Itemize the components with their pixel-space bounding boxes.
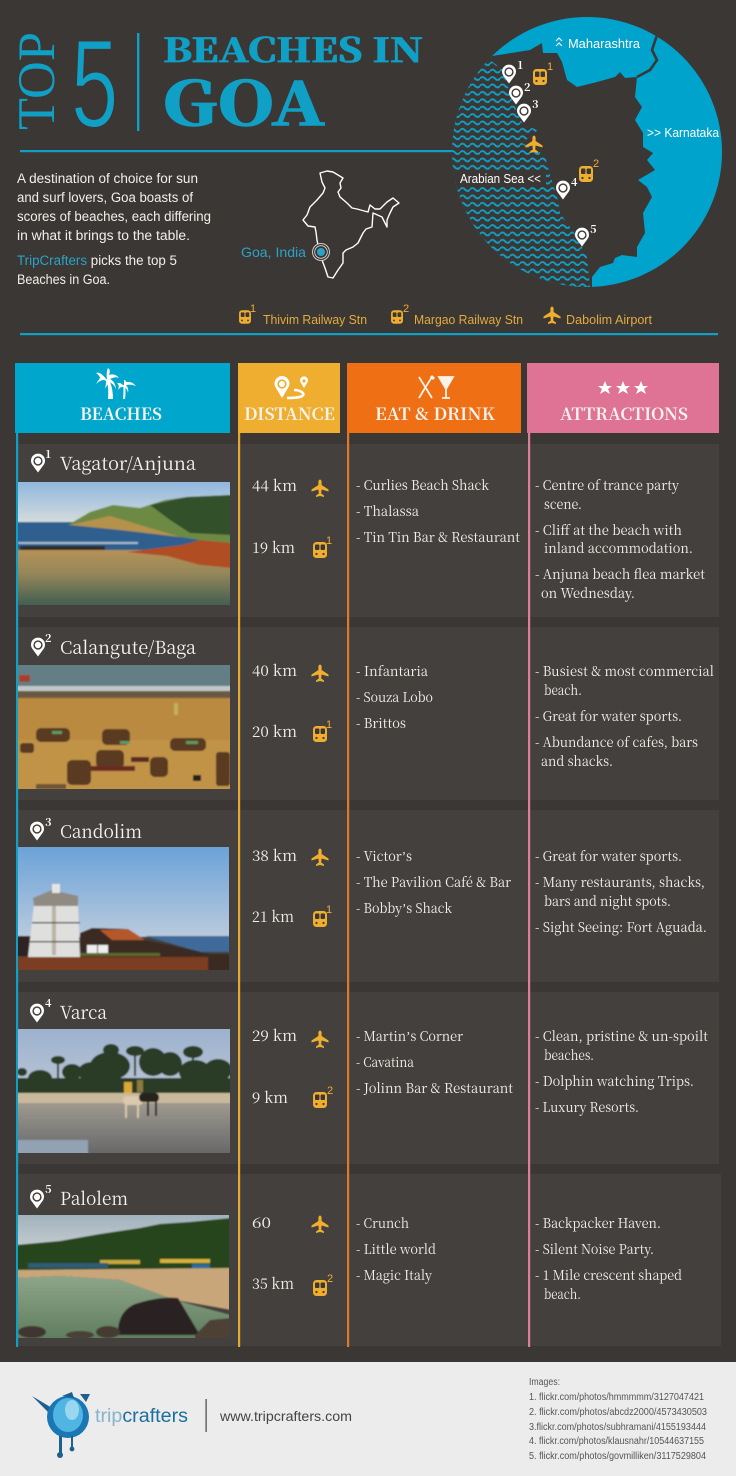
- header label: DISTANCE: [244, 400, 335, 425]
- attractions list: [535, 474, 705, 602]
- beach pins: 3: [532, 96, 538, 112]
- map labels: Maharashtra: [568, 36, 641, 51]
- icon: three stars: [598, 381, 648, 394]
- website: www.tripcrafters.com: [219, 1408, 352, 1424]
- photo: Calangute beach: [16, 663, 232, 791]
- title divider: [137, 33, 139, 131]
- icon: palm trees: [96, 368, 136, 399]
- attractions list: - Many restaurants, shacks,: [535, 871, 705, 891]
- distances: 60: [252, 1212, 271, 1233]
- attractions list: beaches.: [544, 1044, 594, 1064]
- row 2: Calangute/Baga: [16, 630, 714, 791]
- intro text: Beaches in Goa.: [17, 272, 110, 287]
- photo: Vagator coast: [16, 480, 232, 607]
- beach title: Varca: [60, 999, 107, 1025]
- title: Goa: GOA: [163, 57, 325, 142]
- title: TOP: TOP: [8, 32, 66, 130]
- attractions list: and shacks.: [541, 750, 613, 770]
- beach title: 5: [45, 1181, 52, 1197]
- Arabian Sea waves: [452, 61, 590, 287]
- beach title: Calangute/Baga: [60, 634, 196, 660]
- attractions list: [535, 845, 707, 936]
- eat and drink list: [356, 1212, 436, 1284]
- eat and drink list: [356, 1025, 513, 1097]
- photo: Fort Aguada: [16, 845, 231, 972]
- map labels: Arabian Sea <<: [460, 171, 541, 186]
- intro text: scores of beaches, each differing: [17, 209, 211, 224]
- image credits: 1. flickr.com/photos/hmmmmm/3127047421: [529, 1392, 704, 1403]
- intro text: and surf lovers, Goa boasts of: [17, 190, 193, 205]
- horses and riders: [123, 1080, 159, 1118]
- eat and drink list: - Bobby’s Shack: [356, 897, 453, 917]
- map transport icons: 1: [547, 61, 553, 73]
- attractions list: - 1 Mile crescent shaped: [535, 1264, 682, 1284]
- legend: Thivim Railway Stn: [263, 313, 367, 327]
- beach pins: 4: [571, 174, 578, 190]
- eat and drink list: - Victor’s: [356, 845, 412, 865]
- beach pins: [502, 57, 597, 246]
- eat and drink list: - Crunch: [356, 1212, 409, 1232]
- eat and drink list: - The Pavilion Café & Bar: [356, 871, 512, 891]
- distances: 1: [326, 904, 332, 916]
- map transport icons: [526, 61, 599, 182]
- attractions list: - Abundance of cafes, bars: [535, 731, 698, 751]
- beach title: [30, 995, 107, 1025]
- footer: [0, 1362, 736, 1476]
- eat and drink list: [356, 845, 512, 917]
- distances: 19 km: [252, 537, 295, 558]
- logo wordmark: tripcrafters: [95, 1406, 188, 1427]
- attractions list: - Great for water sports.: [535, 845, 682, 865]
- attractions list: - Cliff at the beach with: [535, 519, 682, 539]
- beach title: [30, 814, 142, 844]
- attractions list: [535, 1025, 708, 1116]
- India map: [241, 171, 399, 278]
- panel: beaches header: [15, 363, 230, 433]
- distances: 1: [326, 535, 332, 547]
- image credits: 2. flickr.com/photos/abcdz2000/4573430503: [529, 1407, 707, 1418]
- beach pins: 5: [590, 221, 597, 237]
- eat and drink list: [356, 474, 520, 546]
- map transport icons: 2: [593, 158, 599, 170]
- photo: Varca horses: [16, 1027, 232, 1155]
- image credits: 3.flickr.com/photos/subhramani/4155193444: [529, 1422, 706, 1433]
- beach pins: 1: [517, 57, 523, 73]
- distances: [252, 1212, 333, 1296]
- row bands: [18, 444, 721, 1346]
- distances: 2: [327, 1273, 333, 1285]
- attractions list: beach.: [544, 1283, 581, 1303]
- eat and drink list: - Martin’s Corner: [356, 1025, 464, 1045]
- beach title: 2: [45, 630, 51, 646]
- eat and drink list: - Thalassa: [356, 500, 419, 520]
- attractions list: - Clean, pristine & un-spoilt: [535, 1025, 708, 1045]
- row 3: Candolim: [16, 814, 707, 972]
- distances: 44 km: [252, 475, 297, 496]
- header label: EAT & DRINK: [375, 400, 496, 425]
- Goa marker: [312, 244, 330, 260]
- attractions list: - Sight Seeing: Fort Aguada.: [535, 916, 707, 936]
- header label: BEACHES: [80, 400, 162, 425]
- eat and drink list: - Jolinn Bar & Restaurant: [356, 1077, 513, 1097]
- eat and drink list: - Souza Lobo: [356, 686, 433, 706]
- attractions list: - Busiest & most commercial: [535, 660, 714, 680]
- attractions list: - Great for water sports.: [535, 705, 682, 725]
- attractions list: [535, 1212, 682, 1303]
- panel: attractions header: [527, 363, 719, 433]
- attractions list: inland accommodation.: [544, 537, 693, 557]
- distances: [252, 660, 332, 742]
- beach title: 1: [45, 446, 51, 462]
- icon: cutlery and glass: [419, 376, 453, 398]
- attractions list: bars and night spots.: [544, 890, 671, 910]
- row 1: Vagator/Anjuna: [16, 446, 705, 607]
- row 4: Varca: [16, 995, 708, 1155]
- distances: 21 km: [252, 906, 294, 927]
- panel: distance header: [238, 363, 340, 433]
- legend: Margao Railway Stn: [414, 313, 523, 327]
- legend: 2: [403, 303, 409, 315]
- title: [8, 14, 423, 154]
- title: Beaches in: BEACHES IN: [163, 25, 423, 72]
- panel: eat and drink header: [347, 363, 521, 433]
- distances: 40 km: [252, 660, 297, 681]
- eat and drink list: - Brittos: [356, 712, 406, 732]
- attractions list: - Luxury Resorts.: [535, 1096, 639, 1116]
- eat and drink list: - Cavatina: [356, 1051, 414, 1071]
- image credits: [529, 1377, 707, 1462]
- attractions list: on Wednesday.: [541, 582, 635, 602]
- attractions list: - Anjuna beach flea market: [535, 563, 705, 583]
- intro text: in what it brings to the table.: [17, 228, 190, 243]
- attractions list: scene.: [544, 493, 582, 513]
- beach title: Candolim: [60, 818, 142, 844]
- header label: ATTRACTIONS: [560, 400, 688, 425]
- title: 5: 5: [71, 14, 118, 154]
- image credits: Images:: [529, 1377, 560, 1388]
- distances: [252, 1025, 333, 1108]
- Goa label: Goa, India: [241, 244, 306, 260]
- attractions list: - Dolphin watching Trips.: [535, 1070, 694, 1090]
- map labels: >> Karnataka: [647, 125, 720, 140]
- photo: Palolem bay: [16, 1213, 231, 1340]
- attractions list: beach.: [544, 679, 582, 699]
- attractions list: - Backpacker Haven.: [535, 1212, 661, 1232]
- beach title: Palolem: [60, 1185, 128, 1211]
- beach title: 4: [45, 995, 52, 1011]
- distances: [252, 475, 332, 558]
- eat and drink list: - Infantaria: [356, 660, 428, 680]
- attractions list: - Centre of trance party: [535, 474, 680, 494]
- beach title: 3: [45, 814, 51, 830]
- legend: [239, 303, 653, 327]
- legend: Dabolim Airport: [566, 313, 653, 327]
- intro text: [17, 171, 211, 287]
- eat and drink list: - Magic Italy: [356, 1264, 433, 1284]
- distances: 2: [327, 1085, 333, 1097]
- beach pins: 2: [524, 79, 530, 95]
- intro text: TripCrafters picks the top 5: [17, 253, 177, 268]
- image credits: 5. flickr.com/photos/govmilliken/3117529804: [529, 1451, 706, 1462]
- logo: tripcrafters globe: [32, 1392, 90, 1458]
- India outline: [303, 171, 399, 278]
- distances: 1: [326, 719, 332, 731]
- distances: 9 km: [252, 1087, 288, 1108]
- distances: 20 km: [252, 721, 297, 742]
- distances: 29 km: [252, 1025, 297, 1046]
- beach title: Vagator/Anjuna: [60, 450, 196, 476]
- beach title: [30, 1181, 128, 1211]
- attractions list: [535, 660, 714, 770]
- eat and drink list: [356, 660, 433, 732]
- distances: 38 km: [252, 845, 297, 866]
- attractions list: - Silent Noise Party.: [535, 1238, 654, 1258]
- eat and drink list: - Little world: [356, 1238, 436, 1258]
- map labels: [460, 36, 720, 186]
- row 5: Palolem: [16, 1181, 682, 1340]
- eat and drink list: - Curlies Beach Shack: [356, 474, 490, 494]
- legend: 1: [250, 303, 256, 315]
- eat and drink list: - Tin Tin Bar & Restaurant: [356, 526, 520, 546]
- distances: [252, 845, 332, 927]
- column rules: [16, 433, 530, 1347]
- Goa map: [440, 17, 722, 300]
- intro text: A destination of choice for sun: [17, 171, 198, 186]
- image credits: 4. flickr.com/photos/klausnahr/10544637155: [529, 1436, 704, 1447]
- icon: route pins: [274, 376, 308, 398]
- distances: 35 km: [252, 1273, 294, 1294]
